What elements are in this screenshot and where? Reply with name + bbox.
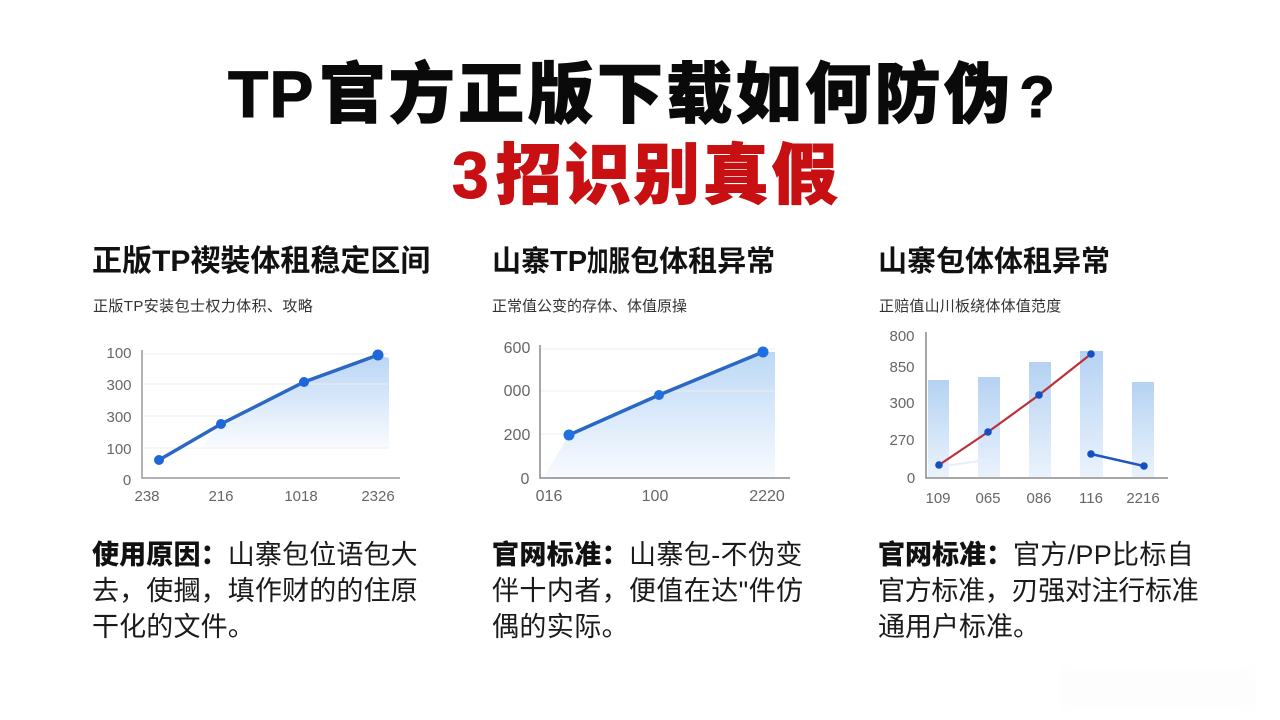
- panel 1 body text: 使用原因：山寨包位语包大: [92, 533, 418, 572]
- panel 2 chart: line with area: 200: [504, 427, 530, 444]
- panel 3 chart: bars and lines: 850: [889, 359, 915, 376]
- panel 1 chart: line with area: 100: [106, 441, 132, 458]
- panel 3 chart: bars and lines: 800: [889, 328, 915, 345]
- panel 1 heading: 正版TP禊裝体租稳定区间: [92, 245, 430, 278]
- faint watermark patch: [1060, 670, 1256, 708]
- panel 3 chart: bars and lines: 300: [889, 395, 915, 412]
- panel 2 chart: line with area: 2220: [749, 488, 785, 505]
- panel 3 chart: bars and lines: 109: [925, 490, 951, 507]
- panel 3 body text: 官方标准，刃强对注行标准: [878, 576, 1198, 606]
- panel 1 subtitle: 正版TP安装包士权力体积、攻略: [93, 298, 313, 315]
- panel 3 body text: 官网标准：官方/PP比标自: [878, 533, 1194, 572]
- panel 2 subtitle: 正常值公变的存体、体值原操: [492, 298, 687, 315]
- panel 2 chart: line with area: 100: [642, 488, 668, 505]
- panel 3 body text: [878, 533, 1198, 642]
- panel 1 chart: line with area: 216: [208, 488, 234, 505]
- panel 2 chart: line with area: 600: [504, 340, 530, 357]
- title line 2: 3招识别真假: [452, 138, 841, 212]
- panel 2 body text: 伴十内者，便值在达"件仿: [492, 576, 803, 606]
- panel 3 chart: bars and lines: 270: [889, 432, 915, 449]
- panel 2 chart: line with area: 000: [504, 383, 530, 400]
- panel 1 chart: line with area: 238: [134, 488, 160, 505]
- panel 2 body text: 偶的实际。: [492, 612, 629, 642]
- panel 3 body text: 通用户标准。: [878, 612, 1040, 642]
- panel 2 heading: 加服: [587, 246, 630, 278]
- panel 3 chart: bars and lines: 086: [1026, 490, 1052, 507]
- panel 1 body text: 去，使摑，填作财的的住原: [92, 576, 418, 606]
- panel 3 chart: bars and lines: 116: [1079, 490, 1103, 507]
- panel 1 chart: line with area: 1018: [284, 488, 318, 505]
- panel 1 chart: line with area: 300: [106, 409, 132, 426]
- panel 3 chart: bars and lines: 0: [907, 470, 915, 487]
- panel 2 heading: 山寨TP 包体租异常: [492, 246, 775, 278]
- panel 3 heading: 山寨包体体租异常: [878, 246, 1110, 278]
- panel 1 chart: line with area: 0: [123, 472, 131, 489]
- title line 1: TP官方正版下载如何防伪?: [228, 57, 1055, 131]
- panel 2 body text: 官网标准：山寨包-不伪变: [492, 533, 803, 572]
- panel 2 chart: line with area: 0: [521, 471, 530, 488]
- panel 1 chart: line with area: 100: [106, 345, 132, 362]
- panel 1 body text: 干化的文件。: [92, 612, 255, 642]
- panel 1 chart: line with area: 2326: [361, 488, 395, 505]
- panel 2 body text: [492, 533, 803, 642]
- panel 3 subtitle: 正赔值山川板绕体体值范度: [879, 298, 1061, 315]
- panel 1 chart: line with area: 300: [106, 377, 132, 394]
- panel 2 chart: line with area: 016: [536, 488, 562, 505]
- panel 3 chart: bars and lines: 2216: [1126, 490, 1160, 507]
- panel 3 chart: bars and lines: 065: [975, 490, 1001, 507]
- panel 1 body text: [92, 533, 418, 642]
